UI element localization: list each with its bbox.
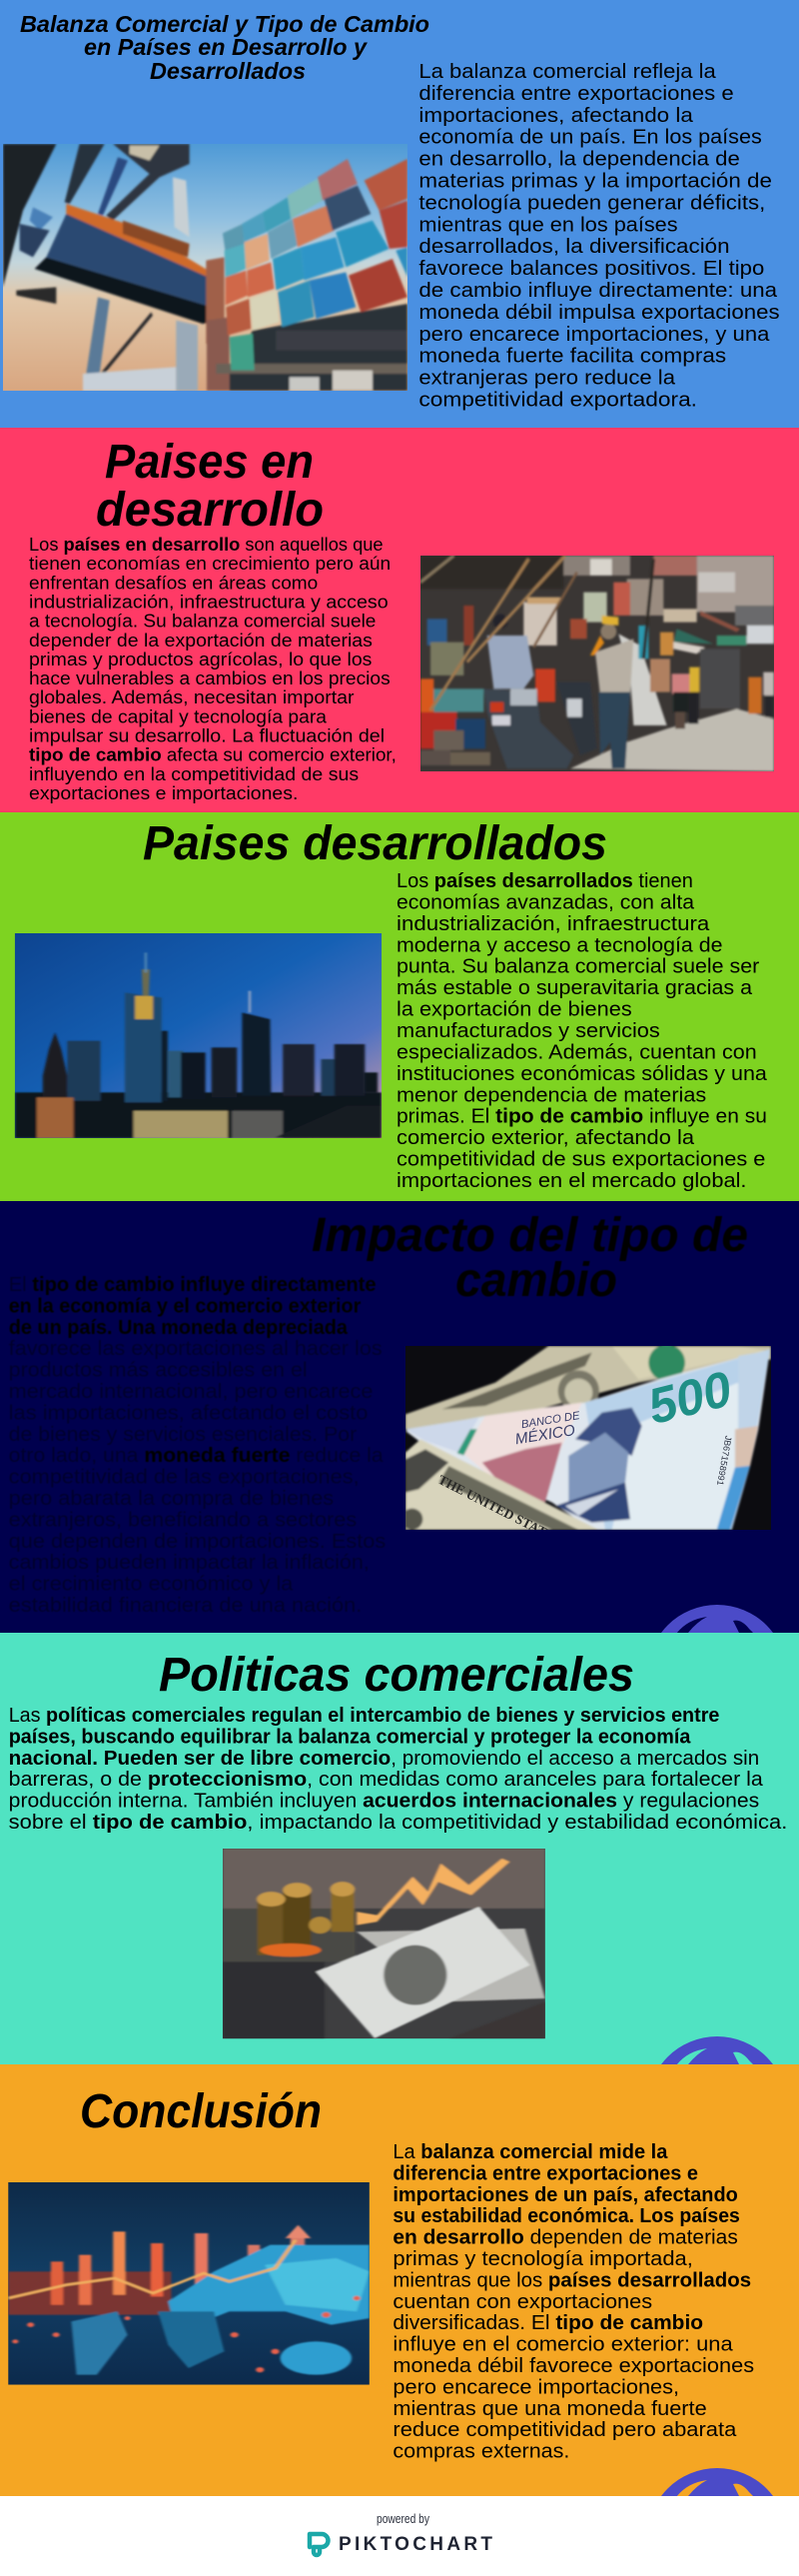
banknote denomination: 500 — [642, 1360, 737, 1435]
developed countries paragraph: menor dependencia de materias — [397, 1083, 706, 1106]
intro paragraph: de cambio influye directamente: una — [418, 279, 778, 302]
exchange rate paragraph: de bienes y servicios esenciales. Por — [9, 1423, 357, 1446]
banknote serial number: JB67158991 — [715, 1435, 734, 1486]
developed countries paragraph: industrialización, infraestructura — [397, 912, 710, 935]
developing countries paragraph: bienes de capital y tecnología para — [29, 706, 328, 726]
exchange rate paragraph: El tipo de cambio influye directamente — [9, 1273, 377, 1296]
exchange rate paragraph: productos más accesibles en el — [9, 1359, 308, 1382]
exchange rate paragraph: competitividad de las exportaciones, — [9, 1466, 360, 1489]
heading: Impacto del tipo de cambio: cambio — [455, 1254, 617, 1307]
exchange rate paragraph: extranjeros, beneficiando a sectores — [9, 1508, 357, 1531]
developed countries paragraph — [397, 869, 768, 1192]
intro paragraph: materias primas y la importación de — [418, 170, 772, 192]
conclusion paragraph — [393, 2140, 754, 2463]
exchange rate paragraph: otro lado, una moneda fuerte reduce la — [9, 1444, 384, 1467]
developed countries paragraph: la exportación de bienes — [397, 998, 632, 1021]
developing countries paragraph: influyendo en la competitividad de sus — [29, 764, 359, 784]
title: Desarrollados — [150, 58, 306, 84]
intro paragraph: mientras que en los países — [418, 213, 678, 236]
developed countries paragraph: comercio exterior, afectando la — [397, 1126, 695, 1149]
photo: shipping containers — [3, 144, 407, 391]
banknote issuer: BANCO DE — [520, 1410, 581, 1431]
trade policy paragraph: Las políticas comerciales regulan el intercambio de bienes y servicios entre — [9, 1704, 719, 1727]
trade policy paragraph — [9, 1704, 787, 1834]
intro paragraph: economía de un país. En los países — [418, 126, 762, 149]
developing countries paragraph: enfrentan desafíos en áreas como — [29, 573, 318, 593]
panel: politicas comerciales — [0, 1633, 799, 2064]
panel: impacto del tipo de cambio — [0, 1201, 799, 1633]
dollar bill legend: THE UNITED STATES — [435, 1472, 563, 1547]
panel: introduction — [0, 0, 799, 428]
conclusion paragraph: pero encarece importaciones, — [393, 2375, 679, 2398]
conclusion paragraph: cuentan con exportaciones — [393, 2290, 652, 2313]
intro paragraph: favorece balances positivos. El tipo — [418, 257, 764, 280]
trade policy paragraph: nacional. Pueden ser de libre comercio, promoviendo el acceso a mercados sin — [9, 1747, 759, 1770]
intro paragraph: en desarrollo, la dependencia de — [418, 148, 740, 171]
developing countries paragraph: depender de la exportación de materias — [29, 631, 373, 650]
developed countries paragraph: más estable o superavitaria gracias a — [397, 976, 753, 999]
developed countries paragraph: moderna y acceso a tecnología de — [397, 933, 723, 956]
developing countries paragraph: primas y productos agrícolas, lo que los — [29, 649, 372, 669]
conclusion paragraph: en desarrollo dependen de materias — [393, 2226, 738, 2249]
intro paragraph: extranjeras pero reduce la — [418, 367, 676, 390]
icon: globe — [661, 2036, 773, 2064]
exchange rate paragraph: de un país. Una moneda depreciada — [9, 1316, 349, 1339]
developing countries paragraph: tipo de cambio afecta su comercio exterior, — [29, 745, 397, 765]
conclusion paragraph: primas y tecnología importada, — [393, 2247, 693, 2270]
intro paragraph: moneda débil impulsa exportaciones — [418, 301, 780, 324]
developed countries paragraph: Los países desarrollados tienen — [397, 869, 693, 892]
developing countries paragraph: Los países en desarrollo son aquellos que — [29, 535, 384, 555]
title — [20, 11, 429, 84]
conclusion paragraph: diversificadas. El tipo de cambio — [393, 2311, 703, 2334]
panel: conclusión — [0, 2064, 799, 2496]
intro paragraph — [418, 60, 780, 412]
icon: Piktochart logo — [310, 2534, 328, 2555]
exchange rate paragraph: favorece las exportaciones al hacer los — [9, 1337, 383, 1360]
conclusion paragraph: diferencia entre exportaciones e — [393, 2161, 698, 2184]
conclusion paragraph: compras externas. — [393, 2440, 569, 2463]
trade policy paragraph: barreras, o de proteccionismo , con medidas como aranceles para fortalecer la — [9, 1768, 763, 1791]
logo wordmark: PIKTOCHART — [339, 2534, 492, 2555]
developing countries paragraph: impulsar su desarrollo. La fluctuación del — [29, 725, 385, 745]
heading: Paises desarrollados: Paises desarrollados — [143, 817, 607, 870]
developed countries paragraph: manufacturados y servicios — [397, 1019, 660, 1042]
trade policy paragraph: países, buscando equilibrar la balanza comercial y proteger la economía — [9, 1725, 691, 1748]
photo: coins, chart and dollar bills — [223, 1849, 545, 2038]
exchange rate paragraph: mercado internacional, pero encarece — [9, 1380, 373, 1403]
photo: peso and dollar banknotes — [405, 1346, 771, 1530]
developing countries paragraph: tienen economías en crecimiento pero aún — [29, 554, 391, 574]
conclusion paragraph: moneda débil favorece exportaciones — [393, 2354, 754, 2377]
trade policy paragraph: sobre el tipo de cambio , impactando la competitividad y estabilidad económica. — [9, 1811, 787, 1834]
exchange rate paragraph: que dependen de importaciones. Estos — [9, 1530, 386, 1553]
exchange rate paragraph: cambios pueden impactar la inflación, — [9, 1551, 370, 1574]
conclusion paragraph: su estabilidad económica. Los países — [393, 2204, 740, 2227]
heading: Paises en desarrollo: desarrollo — [96, 484, 324, 537]
exchange rate paragraph: el crecimiento económico y la — [9, 1573, 294, 1596]
developed countries paragraph: instituciones económicas sólidas y una — [397, 1062, 768, 1085]
heading: Paises en desarrollo — [96, 436, 324, 537]
intro paragraph: moneda fuerte facilita compras — [418, 345, 726, 368]
banknote issuer: MÉXICO — [514, 1422, 576, 1448]
powered by label: powered by — [377, 2512, 430, 2526]
developing countries paragraph: a tecnología. Su balanza comercial suele — [29, 612, 376, 632]
exchange rate paragraph — [9, 1273, 386, 1617]
title: Balanza Comercial y Tipo de Cambio — [20, 11, 429, 37]
title: en Países en Desarrollo y — [84, 34, 369, 60]
panel: países en desarrollo — [0, 428, 799, 812]
heading: Paises en desarrollo: Paises en — [105, 436, 314, 489]
developing countries paragraph: industrialización, infraestructura y acceso — [29, 592, 389, 612]
photo: city skyline at dusk — [15, 933, 382, 1138]
conclusion paragraph: mientras que una moneda fuerte — [393, 2397, 707, 2420]
developed countries paragraph: punta. Su balanza comercial suele ser — [397, 955, 759, 978]
icon: globe — [661, 2468, 773, 2496]
intro paragraph: La balanza comercial refleja la — [418, 60, 716, 83]
exchange rate paragraph: estabilidad financiera de una nación. — [9, 1594, 362, 1617]
developing countries paragraph: hace vulnerables a cambios en los precios — [29, 668, 391, 688]
conclusion paragraph: La balanza comercial mide la — [393, 2140, 668, 2163]
developed countries paragraph: importaciones en el mercado global. — [397, 1169, 747, 1192]
developing countries paragraph: exportaciones e importaciones. — [29, 783, 298, 803]
conclusion paragraph: importaciones de un país, afectando — [393, 2183, 738, 2206]
heading: Conclusión: Conclusión — [80, 2085, 322, 2138]
intro paragraph: pero encarece importaciones, y una — [418, 323, 770, 346]
conclusion paragraph: reduce competitividad pero abarata — [393, 2418, 737, 2441]
developing countries paragraph: globales. Además, necesitan importar — [29, 687, 354, 707]
conclusion paragraph: influye en el comercio exterior: una — [393, 2333, 733, 2356]
exchange rate paragraph: pero abarata la compra de bienes — [9, 1487, 334, 1510]
intro paragraph: competitividad exportadora. — [418, 388, 697, 412]
heading: Politicas comerciales: Politicas comerciales — [159, 1649, 634, 1702]
chart photo: world map with rising bars — [8, 2182, 370, 2385]
intro paragraph: importaciones, afectando la — [418, 104, 694, 127]
conclusion paragraph: mientras que los países desarrollados — [393, 2268, 751, 2291]
developing countries paragraph — [29, 535, 397, 803]
developed countries paragraph: primas. El tipo de cambio influye en su — [397, 1105, 767, 1128]
footer: Piktochart branding — [0, 2496, 799, 2576]
exchange rate paragraph: las importaciones, afectando el costo — [9, 1401, 368, 1424]
panel: países desarrollados — [0, 812, 799, 1201]
heading: Impacto del tipo de cambio — [312, 1209, 748, 1307]
developed countries paragraph: competitividad de sus exportaciones e — [397, 1148, 765, 1171]
heading: Impacto del tipo de cambio: Impacto del tipo de — [312, 1209, 748, 1262]
intro paragraph: diferencia entre exportaciones e — [418, 82, 734, 105]
developed countries paragraph: economías avanzadas, con alta — [397, 890, 695, 913]
exchange rate paragraph: en la economía y el comercio exterior — [9, 1294, 361, 1317]
intro paragraph: tecnología pueden generar déficits, — [418, 191, 765, 214]
icon: globe — [661, 1605, 773, 1633]
developed countries paragraph: especializados. Además, cuentan con — [397, 1040, 757, 1063]
photo: market street — [420, 556, 774, 771]
trade policy paragraph: producción interna. También incluyen acuerdos internacionales y regulaciones — [9, 1790, 759, 1813]
intro paragraph: desarrollados, la diversificación — [418, 235, 730, 258]
